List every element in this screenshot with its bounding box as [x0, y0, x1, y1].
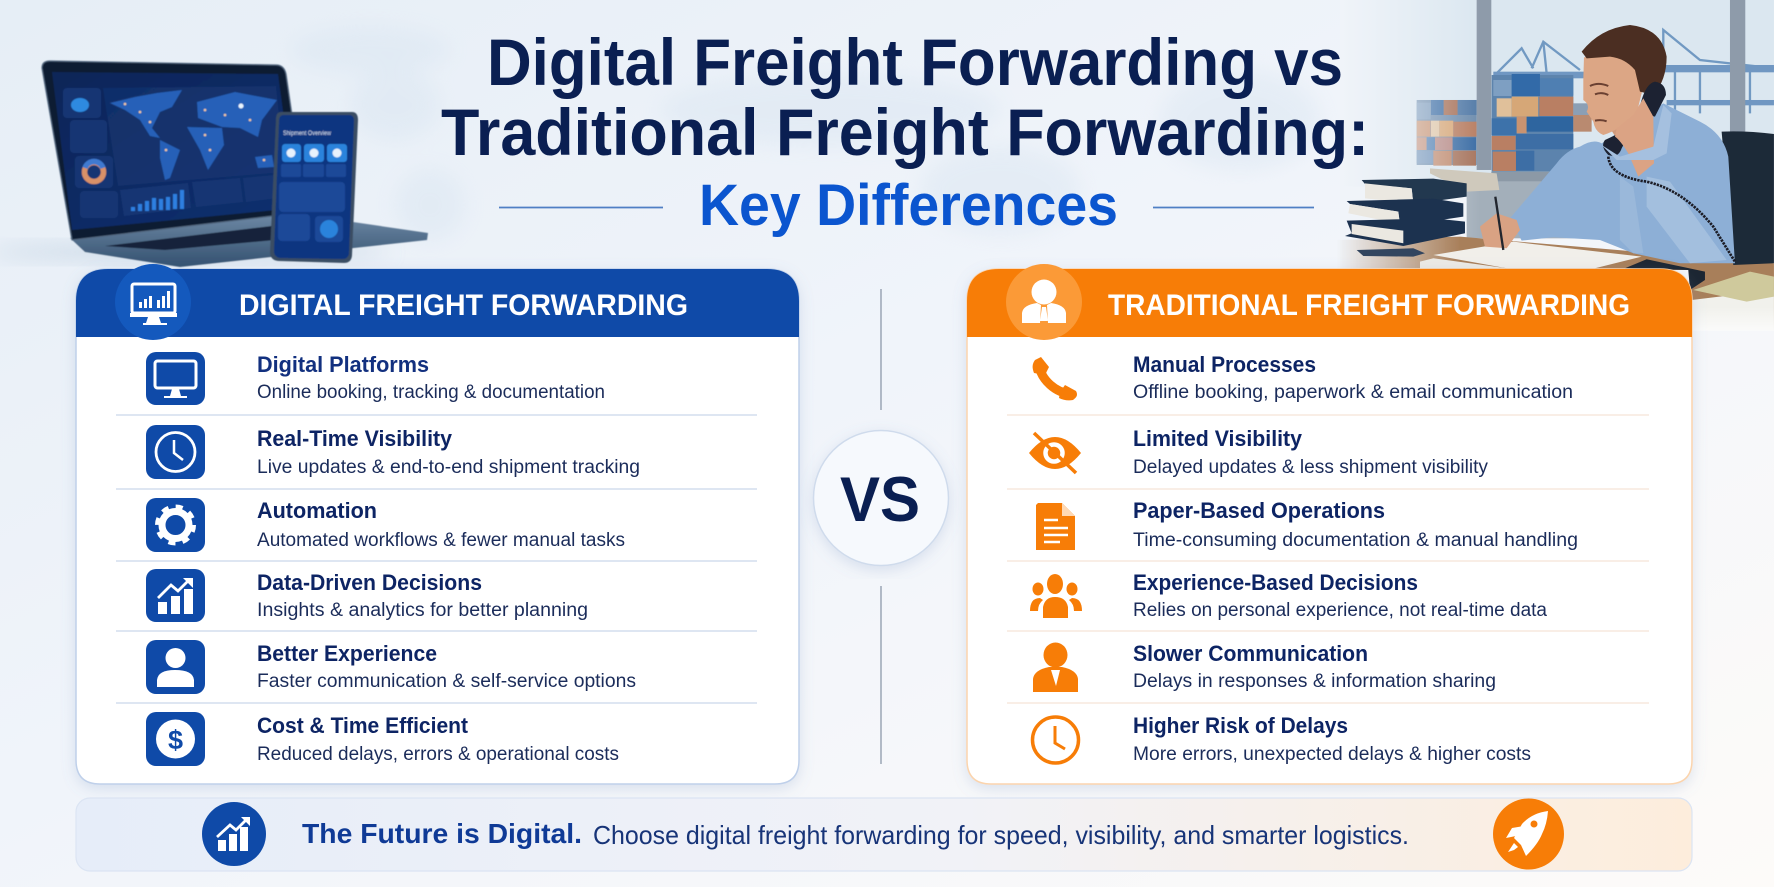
- row: automation: Automation: [257, 498, 377, 523]
- hair: [1582, 25, 1667, 95]
- laptop base: [70, 215, 428, 267]
- row: better experience: Faster communication & self-service options: [257, 671, 636, 692]
- dashboard cards: [63, 86, 285, 218]
- phone heading: Shipment Overview: [283, 130, 331, 137]
- row: digital platforms: [146, 352, 605, 405]
- bar chart: [131, 190, 184, 211]
- icon: clock: [146, 425, 205, 479]
- row: slower communication: Slower Communication: [1133, 641, 1368, 666]
- row: experience-based decisions: Relies on personal experience, not real-time data: [1133, 600, 1547, 621]
- notebook: [1433, 242, 1642, 268]
- small blue pie: [71, 98, 89, 112]
- desk and man: [1337, 25, 1774, 331]
- row: higher risk of delays: [1032, 713, 1531, 765]
- subtitle: Key Differences: [699, 173, 1118, 238]
- banner background: [76, 798, 1692, 871]
- icon: dollar: [146, 712, 205, 766]
- icon: person: [146, 640, 205, 694]
- row: data-driven decisions: [146, 569, 588, 622]
- icon: chart: [146, 569, 205, 622]
- icon: gear: [146, 498, 205, 552]
- papers: [1692, 290, 1774, 330]
- banner icon: rocket: [1493, 798, 1564, 870]
- banner headline: The Future is Digital.: [302, 818, 582, 849]
- row: manual processes: Offline booking, paperwork & email communication: [1133, 382, 1573, 403]
- handset: [1603, 82, 1666, 156]
- writing hand: [1480, 213, 1520, 248]
- image: office with man on phone: [1337, 0, 1774, 331]
- cord: [1608, 157, 1735, 262]
- row: experience-based decisions: [1030, 570, 1547, 621]
- panel header: [967, 269, 1692, 337]
- title line 2: Traditional Freight Forwarding:: [441, 95, 1369, 169]
- phone: [270, 112, 358, 263]
- title: [441, 25, 1369, 238]
- row: cost and time efficient: Cost & Time Efficient: [257, 713, 469, 738]
- icon: crossed eye: [1029, 433, 1081, 473]
- banner icon: chart: [202, 802, 266, 866]
- panel card: [967, 269, 1692, 784]
- binders: [1345, 168, 1499, 257]
- chair: [1722, 131, 1774, 265]
- row: digital platforms: Digital Platforms: [257, 352, 429, 377]
- row: better experience: Better Experience: [257, 641, 437, 666]
- row: limited visibility: [1029, 426, 1488, 478]
- icon: people: [1030, 574, 1082, 618]
- panel card: [76, 269, 799, 784]
- vs text: VS: [840, 465, 920, 535]
- icon: document: [1036, 503, 1075, 550]
- icon: monitor: [146, 352, 205, 405]
- facial features: [1590, 84, 1608, 121]
- faint world map backdrop: [290, 26, 1320, 241]
- banner: [76, 798, 1692, 871]
- row: higher risk of delays: Higher Risk of Delays: [1133, 713, 1348, 738]
- row: cost and time efficient: [146, 712, 619, 766]
- shirt collar: [1602, 105, 1672, 160]
- row: slower communication: [1033, 641, 1496, 692]
- header icon: monitor with chart: [115, 264, 191, 340]
- phone cards: [278, 164, 346, 242]
- cranes: [1497, 30, 1774, 113]
- row: higher risk of delays: More errors, unexpected delays & higher costs: [1133, 744, 1531, 765]
- row: paper-based operations: [1036, 498, 1578, 551]
- fade to background: [1340, 0, 1480, 270]
- row: digital platforms: Online booking, tracking & documentation: [257, 382, 605, 403]
- face: [1583, 50, 1643, 135]
- icon: clock: [1032, 717, 1078, 763]
- icon: person with tie: [1033, 642, 1078, 692]
- icon: dollar: $: [168, 725, 183, 755]
- row: data-driven decisions: Data-Driven Decisions: [257, 570, 482, 595]
- row: real-time visibility: [146, 425, 640, 479]
- neck: [1600, 100, 1653, 143]
- phone tiles: [282, 144, 347, 162]
- row: real-time visibility: Live updates & end-to-end shipment tracking: [257, 457, 640, 478]
- row: paper-based operations: Time-consuming documentation & manual handling: [1133, 530, 1578, 551]
- row: automation: [146, 498, 625, 552]
- row: cost and time efficient: Reduced delays, errors & operational costs: [257, 744, 619, 765]
- icon: phone: [1033, 357, 1077, 400]
- panel: traditional freight forwarding: [967, 264, 1692, 784]
- window scene: [1340, 0, 1774, 238]
- row: data-driven decisions: Insights & analytics for better planning: [257, 600, 588, 621]
- row: experience-based decisions: Experience-Based Decisions: [1133, 570, 1418, 595]
- banner text: Choose digital freight forwarding for speed, visibility, and smarter logistics.: [593, 820, 1409, 850]
- laptop shadow: [0, 243, 390, 261]
- header title: DIGITAL FREIGHT FORWARDING: [239, 289, 688, 322]
- containers: [1417, 74, 1598, 172]
- row: slower communication: Delays in responses & information sharing: [1133, 671, 1496, 692]
- shirt highlights: [1647, 177, 1727, 263]
- vs badge: [814, 430, 948, 566]
- row: real-time visibility: Real-Time Visibility: [257, 426, 453, 451]
- desk: [1337, 237, 1774, 330]
- panel: digital freight forwarding: [76, 264, 799, 784]
- row: limited visibility: Limited Visibility: [1133, 426, 1303, 451]
- panel header: [76, 269, 799, 337]
- vs divider: [814, 289, 948, 764]
- phone base: [1625, 259, 1705, 290]
- row: automation: Automated workflows & fewer manual tasks: [257, 530, 625, 551]
- row: better experience: [146, 640, 636, 694]
- shirt: [1510, 103, 1735, 263]
- pen: [1495, 197, 1503, 250]
- header title: TRADITIONAL FREIGHT FORWARDING: [1108, 289, 1630, 322]
- header icon: businessman: [1006, 264, 1082, 340]
- row: limited visibility: Delayed updates & less shipment visibility: [1133, 457, 1488, 478]
- donut chart: [84, 162, 104, 182]
- row: paper-based operations: Paper-Based Operations: [1133, 498, 1385, 523]
- row: manual processes: Manual Processes: [1133, 352, 1316, 377]
- raised hand: [1615, 98, 1654, 177]
- laptop screen: [42, 61, 306, 240]
- row: manual processes: [1033, 352, 1573, 403]
- map markers: [124, 103, 265, 161]
- title line 1: Digital Freight Forwarding vs: [487, 25, 1343, 99]
- image: laptop and phone dashboard: [0, 61, 428, 267]
- window frame: [1477, 0, 1491, 170]
- world map: [110, 90, 277, 180]
